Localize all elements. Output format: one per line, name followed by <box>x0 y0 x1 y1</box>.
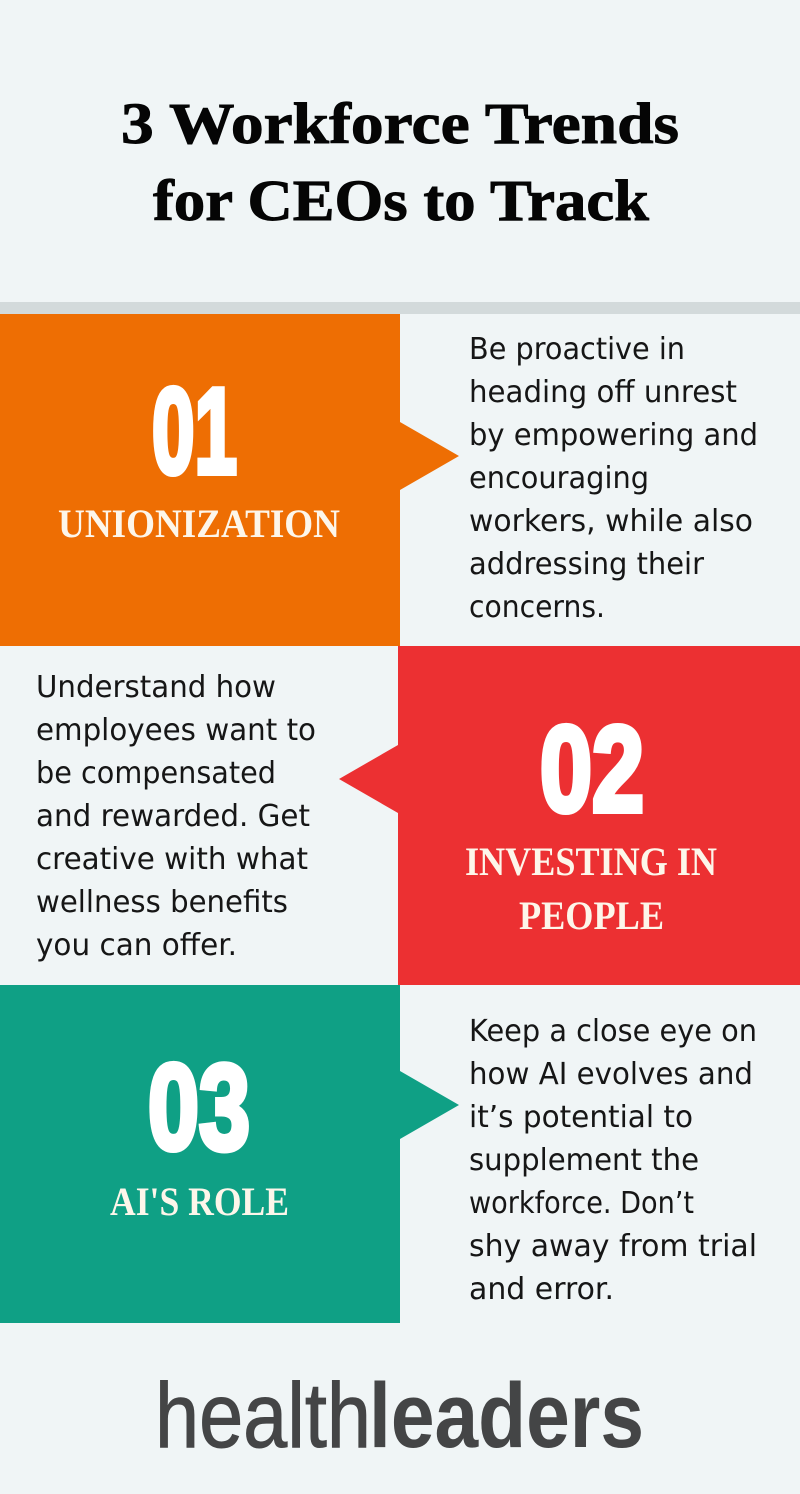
logo: healthleaders: leaders <box>369 1365 644 1467</box>
text block: investing in people: wellness benefits <box>36 885 288 920</box>
callout shape: orange <box>0 314 459 646</box>
text block: AI's role: how AI evolves and <box>469 1057 753 1092</box>
text block: unionization: heading off unrest <box>469 375 737 410</box>
callout shape: red <box>339 646 800 985</box>
panel: investing in people <box>339 646 800 985</box>
text block: AI's role: Keep a close eye on <box>469 1014 757 1049</box>
title: for CEOs to Track <box>153 168 650 233</box>
title <box>121 91 679 233</box>
text block: investing in people: and rewarded. Get <box>36 799 310 834</box>
text block: investing in people: be compensated <box>36 756 276 791</box>
text block: investing in people: creative with what <box>36 842 308 877</box>
number 02: 02 <box>540 701 644 837</box>
heading: AI's role: AI'S ROLE <box>110 1179 289 1224</box>
number 01: 01 <box>152 363 237 499</box>
text block: unionization <box>469 332 758 625</box>
text block: unionization: workers, while also <box>469 504 753 539</box>
panel: AI's role <box>0 985 459 1323</box>
number 03: 03 <box>148 1039 250 1175</box>
text block: AI's role: and error. <box>469 1272 614 1307</box>
panel: unionization <box>0 314 459 646</box>
text block: AI's role: it’s potential to <box>469 1100 693 1135</box>
heading: investing in people: INVESTING IN <box>465 839 717 884</box>
text block: investing in people: Understand how <box>36 670 276 705</box>
text block: AI's role: shy away from trial <box>469 1229 757 1264</box>
text block: AI's role <box>469 1014 757 1307</box>
heading: unionization: UNIONIZATION <box>58 501 340 546</box>
title: 3 Workforce Trends <box>121 91 679 156</box>
callout shape: green <box>0 985 459 1323</box>
text block: unionization: concerns. <box>469 590 605 625</box>
text block: unionization: encouraging <box>469 461 649 496</box>
text block: investing in people <box>36 670 316 963</box>
text block: investing in people: you can offer. <box>36 928 237 963</box>
heading: investing in people: PEOPLE <box>519 893 664 938</box>
text block: unionization: addressing their <box>469 547 705 582</box>
text block: AI's role: supplement the <box>469 1143 699 1178</box>
heading: investing in people <box>465 839 717 938</box>
text block: unionization: Be proactive in <box>469 332 685 367</box>
text block: investing in people: employees want to <box>36 713 316 748</box>
logo: healthleaders: health <box>155 1365 371 1467</box>
text block: AI's role: workforce. Don’t <box>469 1186 694 1221</box>
text block: unionization: by empowering and <box>469 418 758 453</box>
logo: healthleaders <box>155 1365 644 1467</box>
